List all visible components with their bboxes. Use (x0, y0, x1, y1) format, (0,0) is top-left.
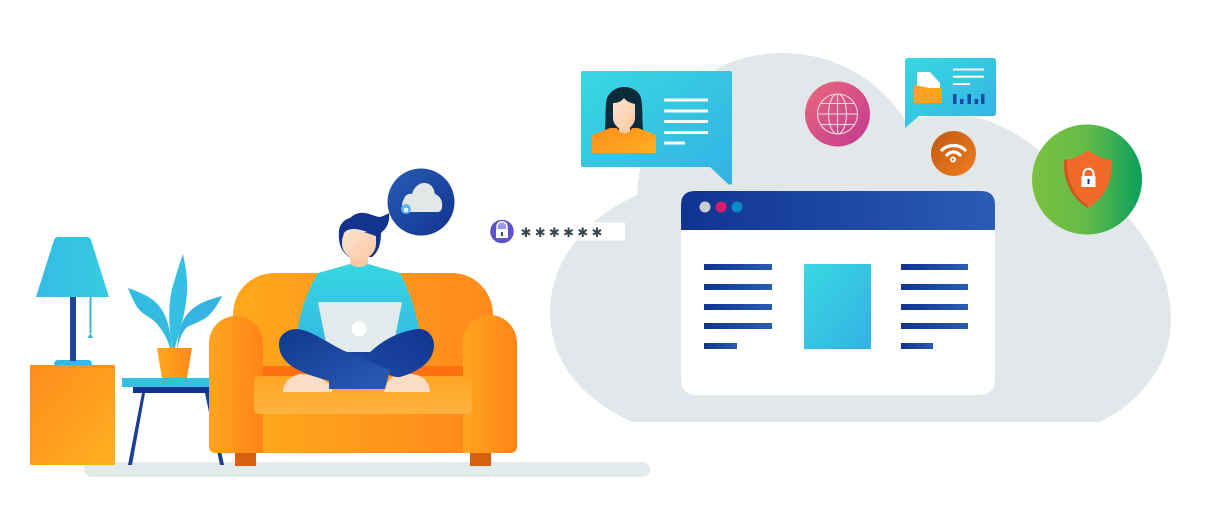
icon: cloud lock thought bubble (388, 168, 454, 236)
hair back (339, 232, 381, 257)
left arm (209, 316, 263, 453)
masked password: ✱✱✱✱✱✱ (520, 226, 606, 241)
seat cushion (254, 376, 472, 414)
image placeholder (804, 264, 871, 349)
left text lines (704, 264, 772, 349)
right arm (463, 315, 517, 453)
sofa (209, 273, 517, 466)
table lamp (30, 237, 115, 368)
side cabinet (30, 365, 115, 465)
shield (1064, 150, 1112, 208)
file folder (914, 72, 942, 103)
window control dots (700, 202, 742, 212)
hair quiff (339, 213, 389, 240)
torso (296, 264, 421, 340)
seat shadow band (258, 366, 468, 378)
sofa base (255, 400, 470, 453)
right text lines (901, 264, 968, 349)
face (342, 229, 376, 260)
person on sofa (279, 213, 434, 392)
padlock (1082, 169, 1096, 187)
text lines (664, 98, 708, 144)
avatar (592, 87, 656, 153)
password field (490, 220, 625, 243)
window body (681, 230, 995, 395)
profile speech bubble (581, 71, 732, 185)
icon: lock badge (490, 220, 514, 243)
title bar (681, 191, 995, 230)
floor shadow (84, 462, 650, 477)
background cloud (550, 53, 1171, 422)
bubble (905, 58, 996, 128)
sofa legs (235, 450, 491, 466)
sofa back (233, 273, 493, 380)
neck (350, 248, 368, 267)
icon: security shield (1032, 124, 1142, 234)
field box (515, 222, 625, 240)
potted plant (128, 254, 222, 378)
feet (283, 374, 430, 392)
crossed legs (279, 329, 434, 389)
side table (122, 378, 224, 465)
icon: wifi (931, 131, 976, 176)
browser window (681, 191, 995, 395)
mini bar chart (953, 94, 984, 104)
document speech bubble (905, 58, 996, 128)
bubble (581, 71, 732, 185)
icon: globe (805, 82, 870, 146)
text lines (953, 68, 984, 85)
laptop (318, 302, 402, 352)
